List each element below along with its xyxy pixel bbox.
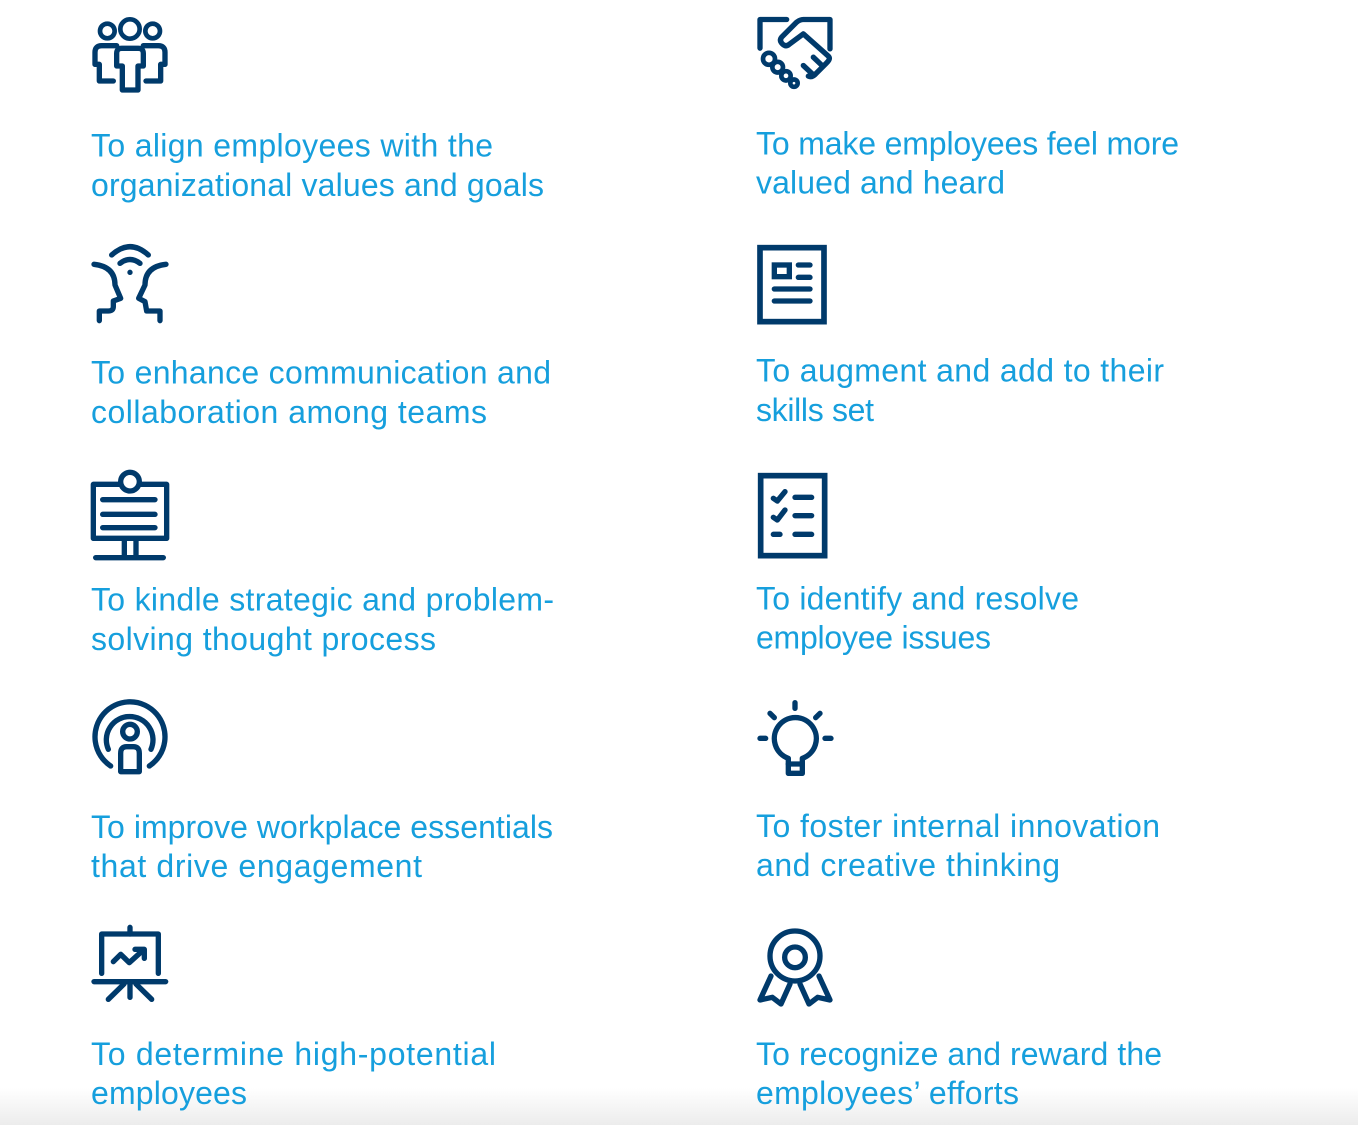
icon: handshake	[760, 19, 830, 87]
panel: align employees	[91, 19, 544, 203]
text: valued and heard: valued and heard	[756, 164, 1005, 200]
text: skills: skills set	[756, 392, 874, 428]
panel: skills	[756, 248, 1164, 428]
panel: resolve issues	[756, 476, 1079, 656]
text: skills	[756, 352, 1164, 428]
text: innovation: To foster internal innovation	[756, 808, 1160, 844]
icon: award rosette	[760, 931, 830, 1004]
text: workplace essentials	[91, 809, 553, 884]
text: communication	[91, 354, 551, 430]
icon: two faces with signal	[94, 247, 166, 321]
text: align employees: organizational values and goals	[91, 167, 544, 203]
text: valued and heard	[756, 126, 1179, 200]
text: communication: To enhance communication and	[91, 354, 551, 390]
text: workplace essentials: that drive engagement	[91, 848, 422, 884]
panel: high-potential employees	[91, 927, 496, 1111]
panel: communication	[91, 247, 551, 430]
icon: chart on easel	[94, 927, 166, 999]
text: communication: collaboration among teams	[91, 394, 487, 430]
panel: workplace essentials	[91, 702, 553, 884]
text: skills: To augment and add to their	[756, 352, 1164, 388]
icon: document	[760, 248, 824, 322]
text: high-potential employees	[91, 1036, 496, 1111]
text: high-potential employees: employees	[91, 1075, 247, 1111]
icon: person with signal rings	[95, 702, 165, 772]
text: strategic thought	[91, 582, 554, 657]
text: innovation	[756, 808, 1160, 883]
text: innovation: and creative thinking	[756, 847, 1060, 883]
text: align employees	[91, 128, 544, 203]
text: valued and heard: To make employees feel more	[756, 126, 1179, 162]
text: resolve issues	[756, 580, 1079, 656]
text: resolve issues: employee issues	[756, 620, 991, 656]
panel: valued and heard	[756, 19, 1179, 201]
text: workplace essentials: To improve workplace essentials	[91, 809, 553, 845]
icon: light bulb	[760, 703, 831, 773]
text: strategic thought: To kindle strategic and problem-	[91, 582, 554, 618]
panel: innovation	[756, 703, 1160, 883]
text: recognition: employees’ efforts	[756, 1075, 1019, 1111]
text: high-potential employees: To determine high-potential	[91, 1036, 496, 1072]
text: align employees: To align employees with the	[91, 128, 493, 164]
icon: team of people	[95, 19, 165, 90]
panel: strategic thought	[91, 472, 554, 657]
text: recognition: To recognize and reward the	[756, 1036, 1162, 1072]
panel: recognition	[756, 931, 1162, 1111]
text: recognition	[756, 1036, 1162, 1111]
icon: checklist	[761, 476, 825, 556]
text: resolve issues: To identify and resolve	[756, 580, 1079, 616]
text: strategic thought: solving thought process	[91, 621, 436, 657]
icon: presentation board	[93, 472, 167, 558]
